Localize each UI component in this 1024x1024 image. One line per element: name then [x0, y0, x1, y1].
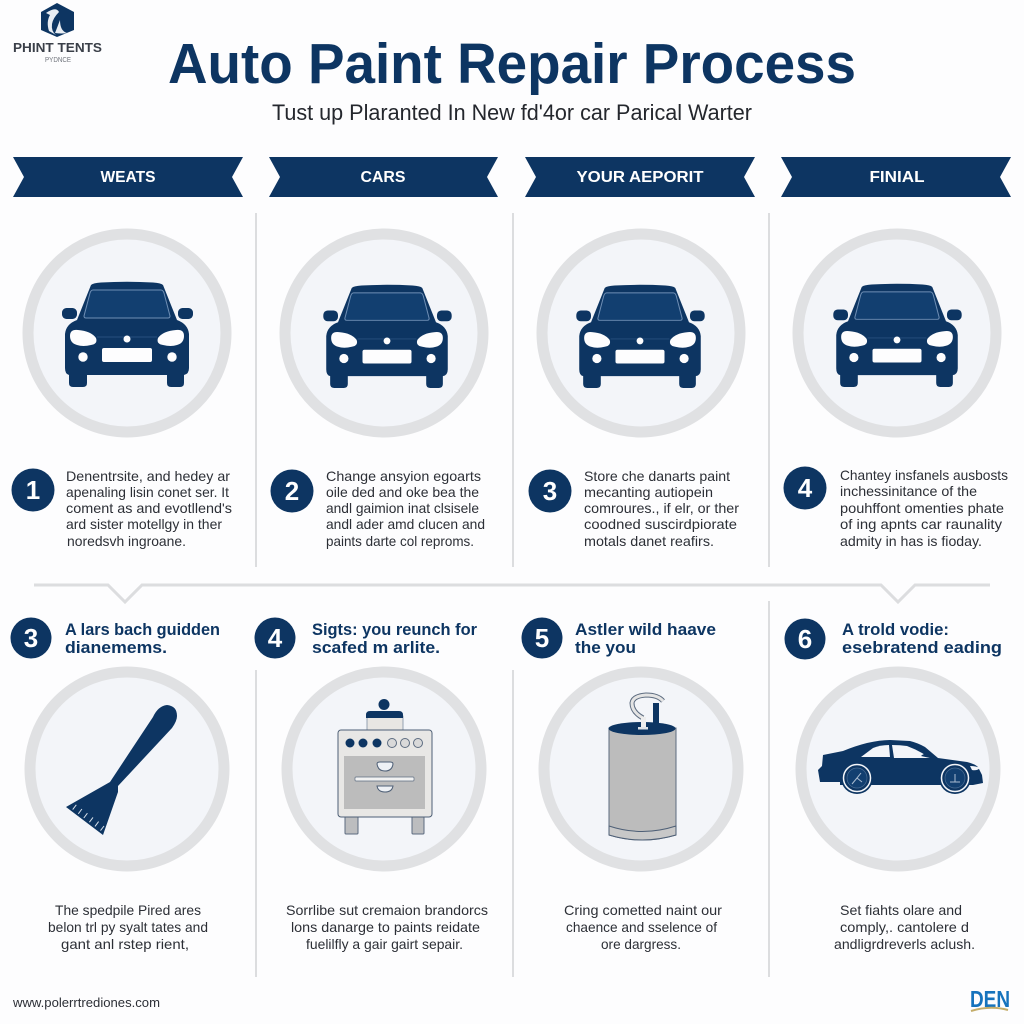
text block 4: [840, 467, 1008, 549]
icon: car front in circle: [28, 234, 226, 432]
panel: step 2 cars: [269, 157, 498, 549]
ribbon: cars: [269, 157, 498, 197]
text block 2: paints darte col reproms.: [326, 533, 474, 549]
number badge 3: 3: [543, 476, 557, 506]
heading: Astler wild haave: [575, 621, 716, 639]
number badge 5: 5: [535, 623, 549, 653]
text block 2: [326, 468, 485, 549]
text block: andligrdreverls aclush.: [834, 936, 975, 952]
text block 3: [584, 468, 739, 549]
number badge 6: 6: [798, 624, 812, 654]
number badge 4: 4: [798, 473, 813, 503]
panel: step 3 your aeporit: [525, 157, 755, 549]
text block: ore dargress.: [601, 936, 681, 952]
icon: car front in circle: [542, 234, 740, 432]
heading: A trold vodie:: [842, 621, 949, 639]
text block 4: Chantey insfanels ausbosts: [840, 467, 1008, 483]
logo: [13, 3, 102, 64]
heading: scafed m arlite.: [312, 639, 440, 657]
text block: The spedpile Pired ares: [55, 902, 201, 918]
text block 1: [66, 468, 232, 549]
ribbon: cars: CARS: [360, 169, 406, 186]
text block: [48, 902, 208, 952]
heading: [575, 621, 716, 657]
icon: paint canister in circle: [544, 672, 738, 866]
number badge 1: [12, 468, 54, 512]
text block 3: motals danet reafirs.: [584, 533, 714, 549]
icon: brush in circle: [30, 672, 224, 866]
heading: [842, 621, 1002, 657]
text block 3: mecanting autiopein: [584, 484, 713, 500]
panel: lower step 4: [254, 618, 488, 952]
text block 1: Denentrsite, and hedey ar: [66, 468, 230, 484]
heading: A lars bach guidden: [65, 621, 220, 639]
panel: step 4 finial: [781, 157, 1011, 549]
text block: lons danarge to paints reidate: [291, 919, 480, 935]
title: Auto Paint Repair Process: [168, 32, 856, 96]
subtitle: Tust up Plaranted In New fd'4or car Parical Warter: [272, 100, 752, 125]
ribbon: your aeporit: YOUR AEPORIT: [576, 169, 704, 186]
text block 2: andl ader amd clucen and: [326, 516, 485, 532]
number badge 4: 4: [268, 623, 283, 653]
ribbon: finial: [781, 157, 1011, 197]
number badge 4: [784, 466, 826, 510]
text block: [286, 902, 488, 952]
text block 2: andl gaimion inat clsisele: [326, 500, 479, 516]
text block 4: inchessinitance of the: [840, 483, 977, 499]
text block 1: ard sister motellgy in ther: [66, 516, 222, 532]
text block: Sorrlibe sut cremaion brandorcs: [286, 902, 488, 918]
text block: [564, 902, 722, 952]
text block 4: of ing apnts car raunality: [840, 516, 1002, 532]
text block 4: admity in has is fioday.: [840, 533, 982, 549]
text block 3: Store che danarts paint: [584, 468, 730, 484]
text block: [834, 902, 975, 952]
ribbon: finial: FINIAL: [870, 169, 925, 186]
text block: belon trl py syalt tates and: [48, 919, 208, 935]
logo: PYDNCE: [45, 57, 71, 64]
text block 3: comroures., if elr, or ther: [584, 500, 739, 516]
panel: lower step 5: [522, 618, 738, 952]
number badge 2: [270, 470, 314, 512]
number badge 1: 1: [26, 475, 40, 505]
text block 4: pouhffont omenties phate: [840, 500, 1004, 516]
panel: step 1 weats: [12, 157, 243, 549]
text block: Set fiahts olare and: [840, 902, 962, 918]
number badge 2: 2: [285, 476, 299, 506]
heading: Sigts: you reunch for: [312, 621, 478, 639]
text block: fuelilfly a gair gairt sepair.: [306, 936, 463, 952]
logo: PHINT TENTS: [13, 40, 102, 55]
text block 1: coment as and evotllend's: [66, 500, 232, 516]
text block: gant anl rstep rient,: [61, 936, 189, 952]
text block 2: oile ded and oke bea the: [326, 484, 479, 500]
ribbon: weats: [13, 157, 243, 197]
number badge 4: [254, 618, 296, 658]
heading: the you: [575, 639, 636, 657]
heading: [65, 621, 220, 657]
icon: car front in circle: [285, 234, 483, 432]
icon: stove in circle: [287, 672, 481, 866]
footer url: www.polerrtrediones.com: [12, 995, 160, 1010]
icon: side view car in circle: [801, 672, 995, 866]
number badge 6: [784, 618, 826, 660]
text block: chaence and sselence of: [566, 919, 717, 935]
ribbon: weats: WEATS: [100, 169, 156, 186]
text block 2: Change ansyion egoarts: [326, 468, 481, 484]
ribbon: your aeporit: [525, 157, 755, 197]
panel: lower step 3: [10, 618, 224, 952]
text block: comply,. cantolere d: [840, 919, 969, 935]
connector line with chevrons: [34, 585, 990, 602]
number badge 3: 3: [24, 623, 38, 653]
text block 1: noredsvh ingroane.: [67, 533, 186, 549]
heading: dianemems.: [65, 639, 167, 657]
footer logo: DEN: [970, 986, 1010, 1012]
number badge 3: [528, 470, 572, 512]
heading: [312, 621, 478, 657]
heading: esebratend eading: [842, 639, 1002, 657]
number badge 5: [522, 618, 562, 658]
number badge 3: [10, 618, 52, 658]
icon: car front in circle: [798, 234, 996, 432]
text block 3: coodned suscirdpiorate: [584, 516, 737, 532]
text block: Cring cometted naint our: [564, 902, 722, 918]
panel: lower step 6: [784, 618, 1002, 952]
text block 1: apenaling lisin conet ser. It: [66, 484, 229, 500]
